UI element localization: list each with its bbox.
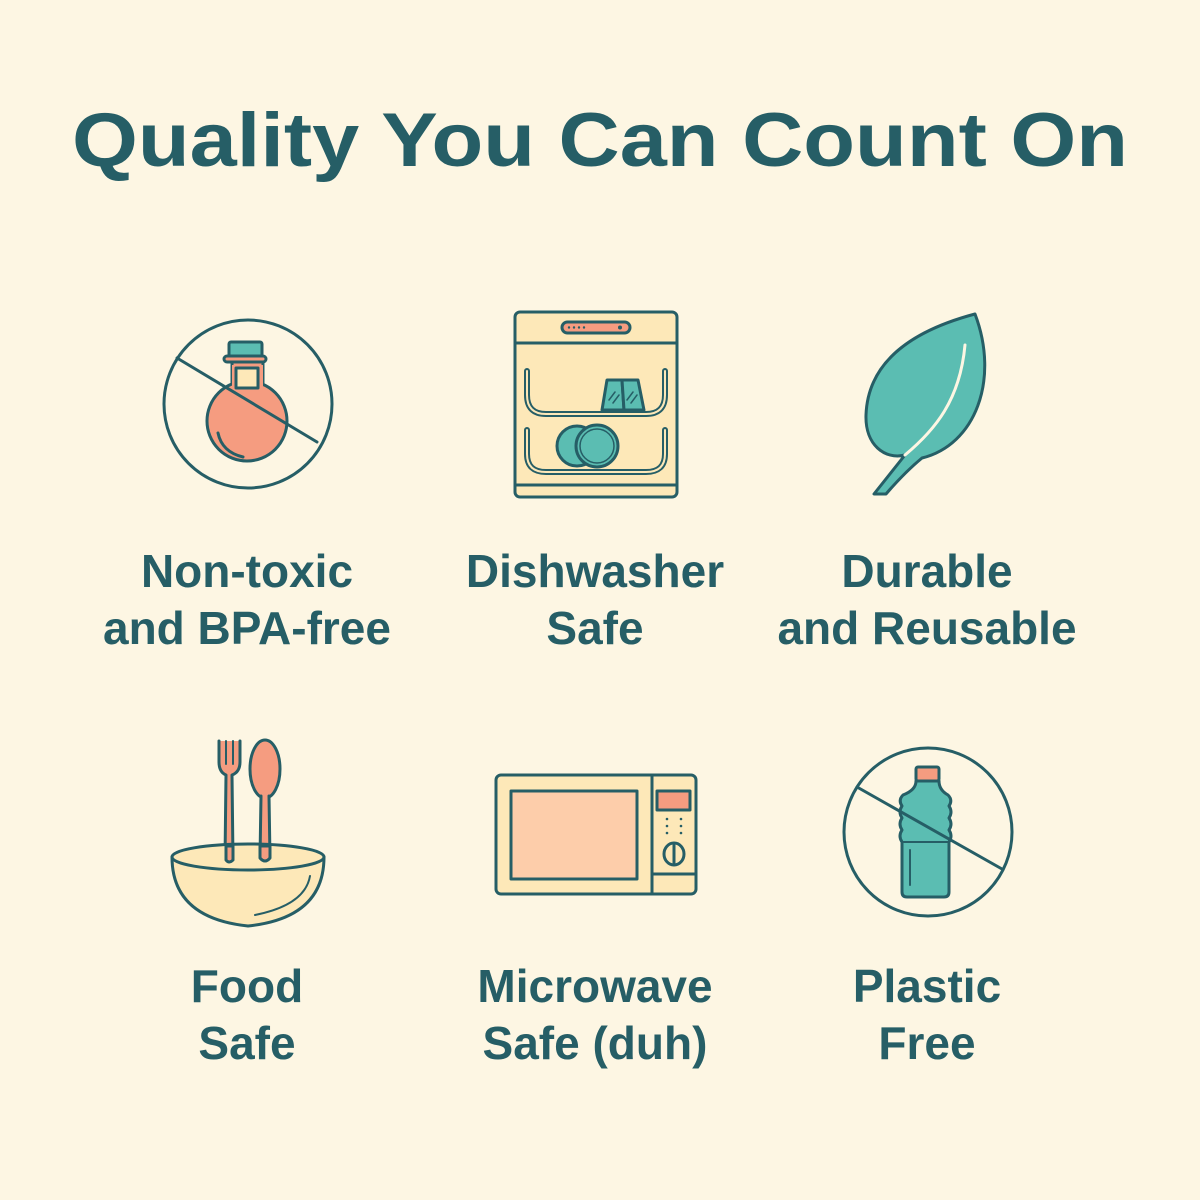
label: non-toxic: Non-toxic [141,545,353,597]
title: Quality You Can Count On [72,98,1128,183]
label: plastic free: Free [878,1017,976,1069]
label: food safe [191,960,303,1069]
label: food safe: Food [191,960,303,1012]
label: microwave [477,960,713,1069]
label: durable: and Reusable [777,602,1077,654]
icon: no plastic bottle [844,748,1012,916]
icon: dishwasher [515,312,677,497]
label: non-toxic [103,545,391,654]
label: dishwasher: Dishwasher [466,545,724,597]
icon: no toxic bottle [164,320,332,488]
label: plastic free: Plastic [853,960,1001,1012]
label: food safe: Safe [198,1017,296,1069]
label: non-toxic: and BPA-free [103,602,391,654]
label: plastic free [853,960,1001,1069]
icon: leaf [866,314,985,494]
label: dishwasher [466,545,724,654]
label: microwave: Safe (duh) [483,1017,707,1069]
icon: microwave [496,775,696,894]
icon: bowl with fork and spoon [172,740,324,926]
label: durable [777,545,1077,654]
label: microwave: Microwave [477,960,713,1012]
label: durable: Durable [841,545,1013,597]
label: dishwasher: Safe [546,602,644,654]
